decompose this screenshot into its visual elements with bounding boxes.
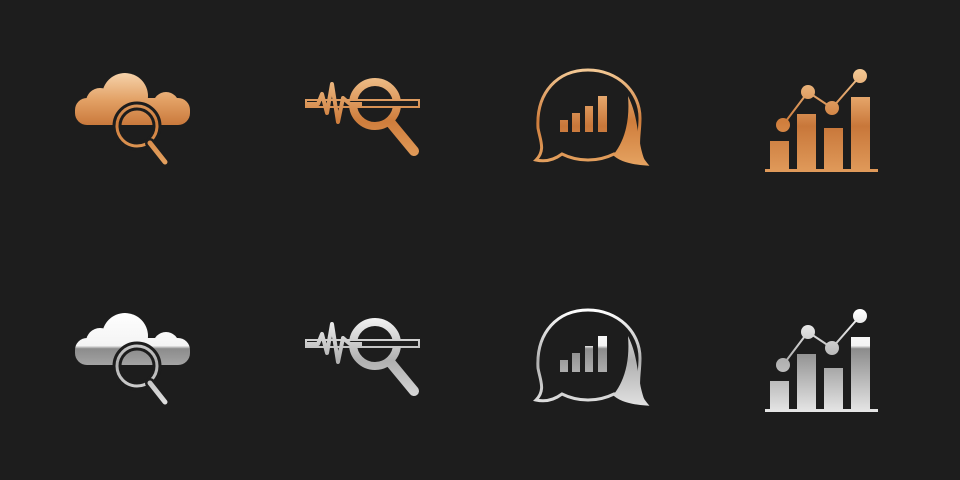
icon: waveform search gold [306, 82, 419, 151]
icon: chat bubble with bars gold [536, 70, 646, 164]
icon: chat bubble with bars silver [536, 310, 646, 404]
icon: cloud search silver [75, 313, 190, 402]
icon: waveform search silver [306, 322, 419, 391]
icon: cloud search gold [75, 73, 190, 162]
icon: bar chart silver [765, 309, 878, 412]
icon: bar chart gold [765, 69, 878, 172]
